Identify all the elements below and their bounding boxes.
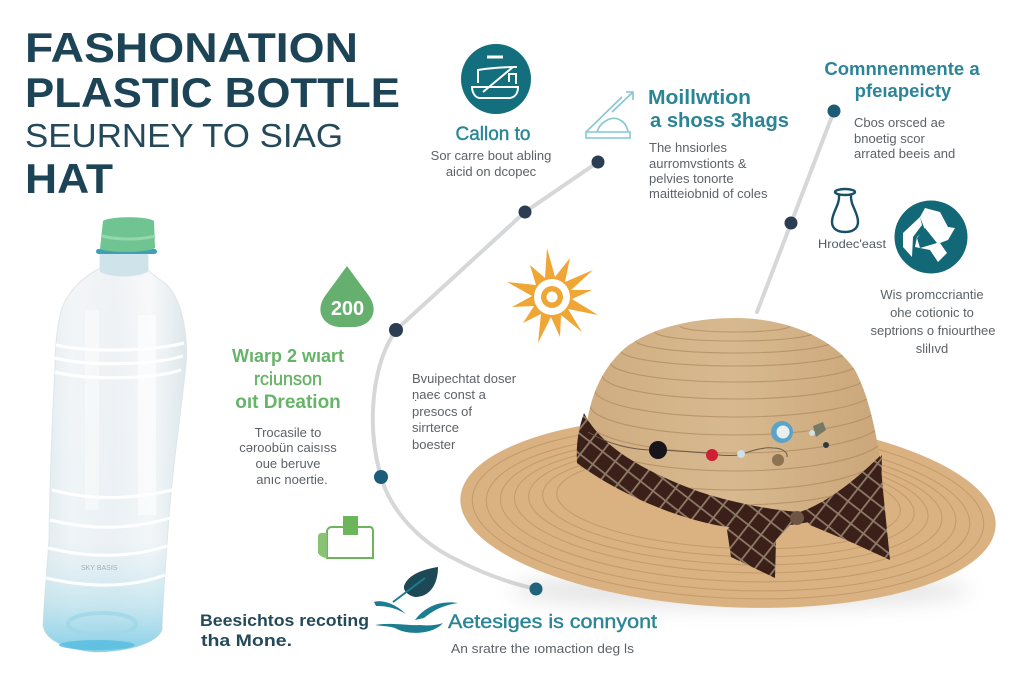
- section: bvuipechtat: [412, 371, 517, 452]
- section: moillwtion: aurromvstionts &: [649, 156, 747, 171]
- section: callon to: Callon to: [456, 124, 530, 145]
- section: wrarp 2 wart: cəroobün caisıss: [239, 440, 337, 455]
- title: FASHONATION: [25, 24, 358, 71]
- section: callon to: aicid on dcopec: [446, 164, 537, 179]
- section: bvuipechtat: boester: [412, 437, 456, 452]
- section: wis promccriantie: ohe cotionic to: [890, 305, 974, 320]
- title: HAT: [25, 155, 113, 202]
- section: wrarp 2 wart: oıt Dreation: [235, 392, 341, 413]
- hat crown: [577, 318, 882, 527]
- icon: green folder: [318, 516, 373, 558]
- hat brim: [455, 403, 1001, 621]
- icon: green drop 200: [320, 266, 374, 327]
- section: aetesiges: [448, 612, 658, 656]
- icon: vase: [832, 189, 858, 232]
- section: comnnenmente: bnoetig scor: [854, 131, 925, 146]
- title: PLASTIC BOTTLE: [25, 69, 400, 116]
- hat band and bow: [577, 413, 890, 578]
- section: wis promccriantie: [870, 287, 996, 356]
- icon: recycling globe: [894, 200, 968, 274]
- section: comnnenmente: pfeıapeicty: [855, 80, 952, 101]
- section: comnnenmente: arrated beeis and: [854, 146, 955, 161]
- title: [25, 24, 400, 202]
- section: wis promccriantie: Wis promccriantie: [880, 287, 984, 302]
- title: SEURNEY TO SIAG: [25, 117, 343, 154]
- hat pins: [588, 421, 829, 466]
- icon: sun: [507, 248, 598, 343]
- label: hrodec east: Hrodec'east: [818, 237, 887, 251]
- section: bvuipechtat: ṇaeє const a: [412, 387, 487, 402]
- section: wrarp 2 wart: Wıarp 2 wıart: [232, 346, 344, 366]
- icon: green drop 200: 200: [331, 298, 364, 320]
- timeline nodes: [374, 104, 840, 596]
- section: callon to: [431, 124, 551, 179]
- section: wis promccriantie: slilıvd: [916, 341, 948, 356]
- icon: leaf and waves: [374, 567, 458, 633]
- section: bvuipechtat: sirrterce: [412, 420, 459, 435]
- section: wrarp 2 wart: [232, 346, 344, 487]
- section: wrarp 2 wart: oue beruve: [255, 456, 321, 471]
- icon: ramp with arrow: [586, 92, 633, 138]
- icon: machine in teal circle: [461, 44, 531, 114]
- section: moillwtion: The hnsiorles: [649, 140, 728, 155]
- section: beesichtos: tha Mone.: [201, 631, 292, 650]
- section: aetesiges: Aetesiges is connyont: [448, 612, 658, 633]
- section: moillwtion: maitteiobnid of coles: [649, 186, 768, 201]
- section: wrarp 2 wart: rciunson: [254, 369, 322, 389]
- plastic bottle: [43, 217, 186, 652]
- section: moillwtion: Moillwtion: [648, 87, 751, 109]
- section: wrarp 2 wart: Trocasile to: [255, 425, 321, 440]
- section: bvuipechtat: presocs of: [412, 404, 472, 419]
- section: bvuipechtat: Bvuipechtat doser: [412, 371, 517, 386]
- section: comnnenmente: [824, 58, 980, 161]
- section: moillwtion: a shoss 3hags: [650, 110, 789, 132]
- section: wis promccriantie: septrions o fniourthee: [870, 323, 996, 338]
- section: comnnenmente: Cbos orsced ae: [854, 115, 945, 130]
- timeline path: [373, 111, 834, 589]
- section: beesichtos: Beesichtos recoting: [200, 611, 369, 630]
- section: moillwtion: [648, 87, 789, 201]
- section: comnnenmente: Comnnenmente a: [824, 58, 980, 79]
- section: wrarp 2 wart: anıc noertie.: [256, 472, 328, 487]
- plastic bottle: SKY BASIS: [81, 565, 118, 572]
- section: callon to: Sor carre bout abling: [431, 148, 551, 163]
- section: beesichtos: [200, 611, 369, 650]
- section: aetesiges: An sratre the ıomaction deg ls: [451, 641, 635, 656]
- section: moillwtion: pelvies tonorte: [649, 171, 734, 186]
- straw hat: [455, 318, 1001, 621]
